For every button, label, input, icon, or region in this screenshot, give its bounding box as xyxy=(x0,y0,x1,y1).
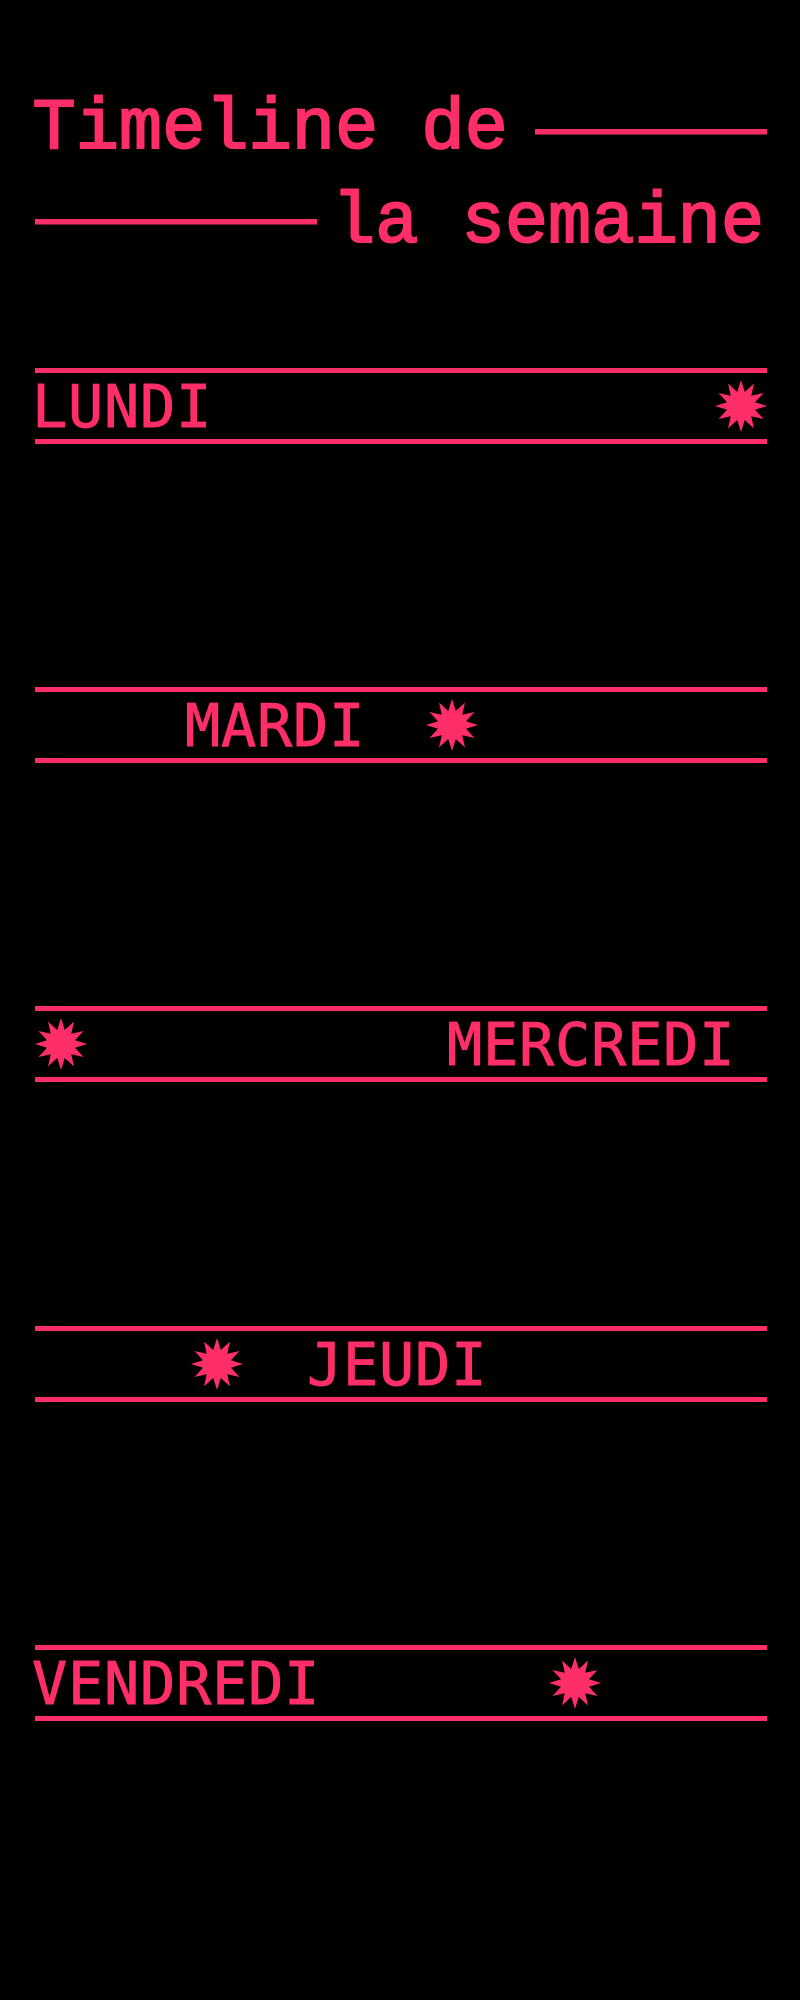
title rule right xyxy=(535,129,767,134)
row: jeudi xyxy=(35,1326,767,1402)
row: mercredi xyxy=(35,1006,767,1082)
label: lundi: LUNDI xyxy=(32,373,212,441)
label: jeudi: JEUDI xyxy=(307,1331,487,1399)
title xyxy=(32,88,767,264)
row: vendredi xyxy=(32,1645,767,1721)
icon: star xyxy=(549,1657,601,1709)
row: mardi xyxy=(35,687,767,763)
title rule left xyxy=(35,219,317,224)
row: lundi xyxy=(32,368,767,444)
icon: star xyxy=(426,699,478,751)
icon: star xyxy=(191,1338,243,1390)
label: mercredi: MERCREDI xyxy=(447,1011,735,1079)
title line 2: la semaine xyxy=(332,182,764,264)
label: mardi: MARDI xyxy=(185,692,365,760)
label: vendredi: VENDREDI xyxy=(32,1650,320,1718)
title line 1: Timeline de xyxy=(32,88,508,170)
icon: star xyxy=(715,380,767,432)
icon: star xyxy=(35,1018,87,1070)
